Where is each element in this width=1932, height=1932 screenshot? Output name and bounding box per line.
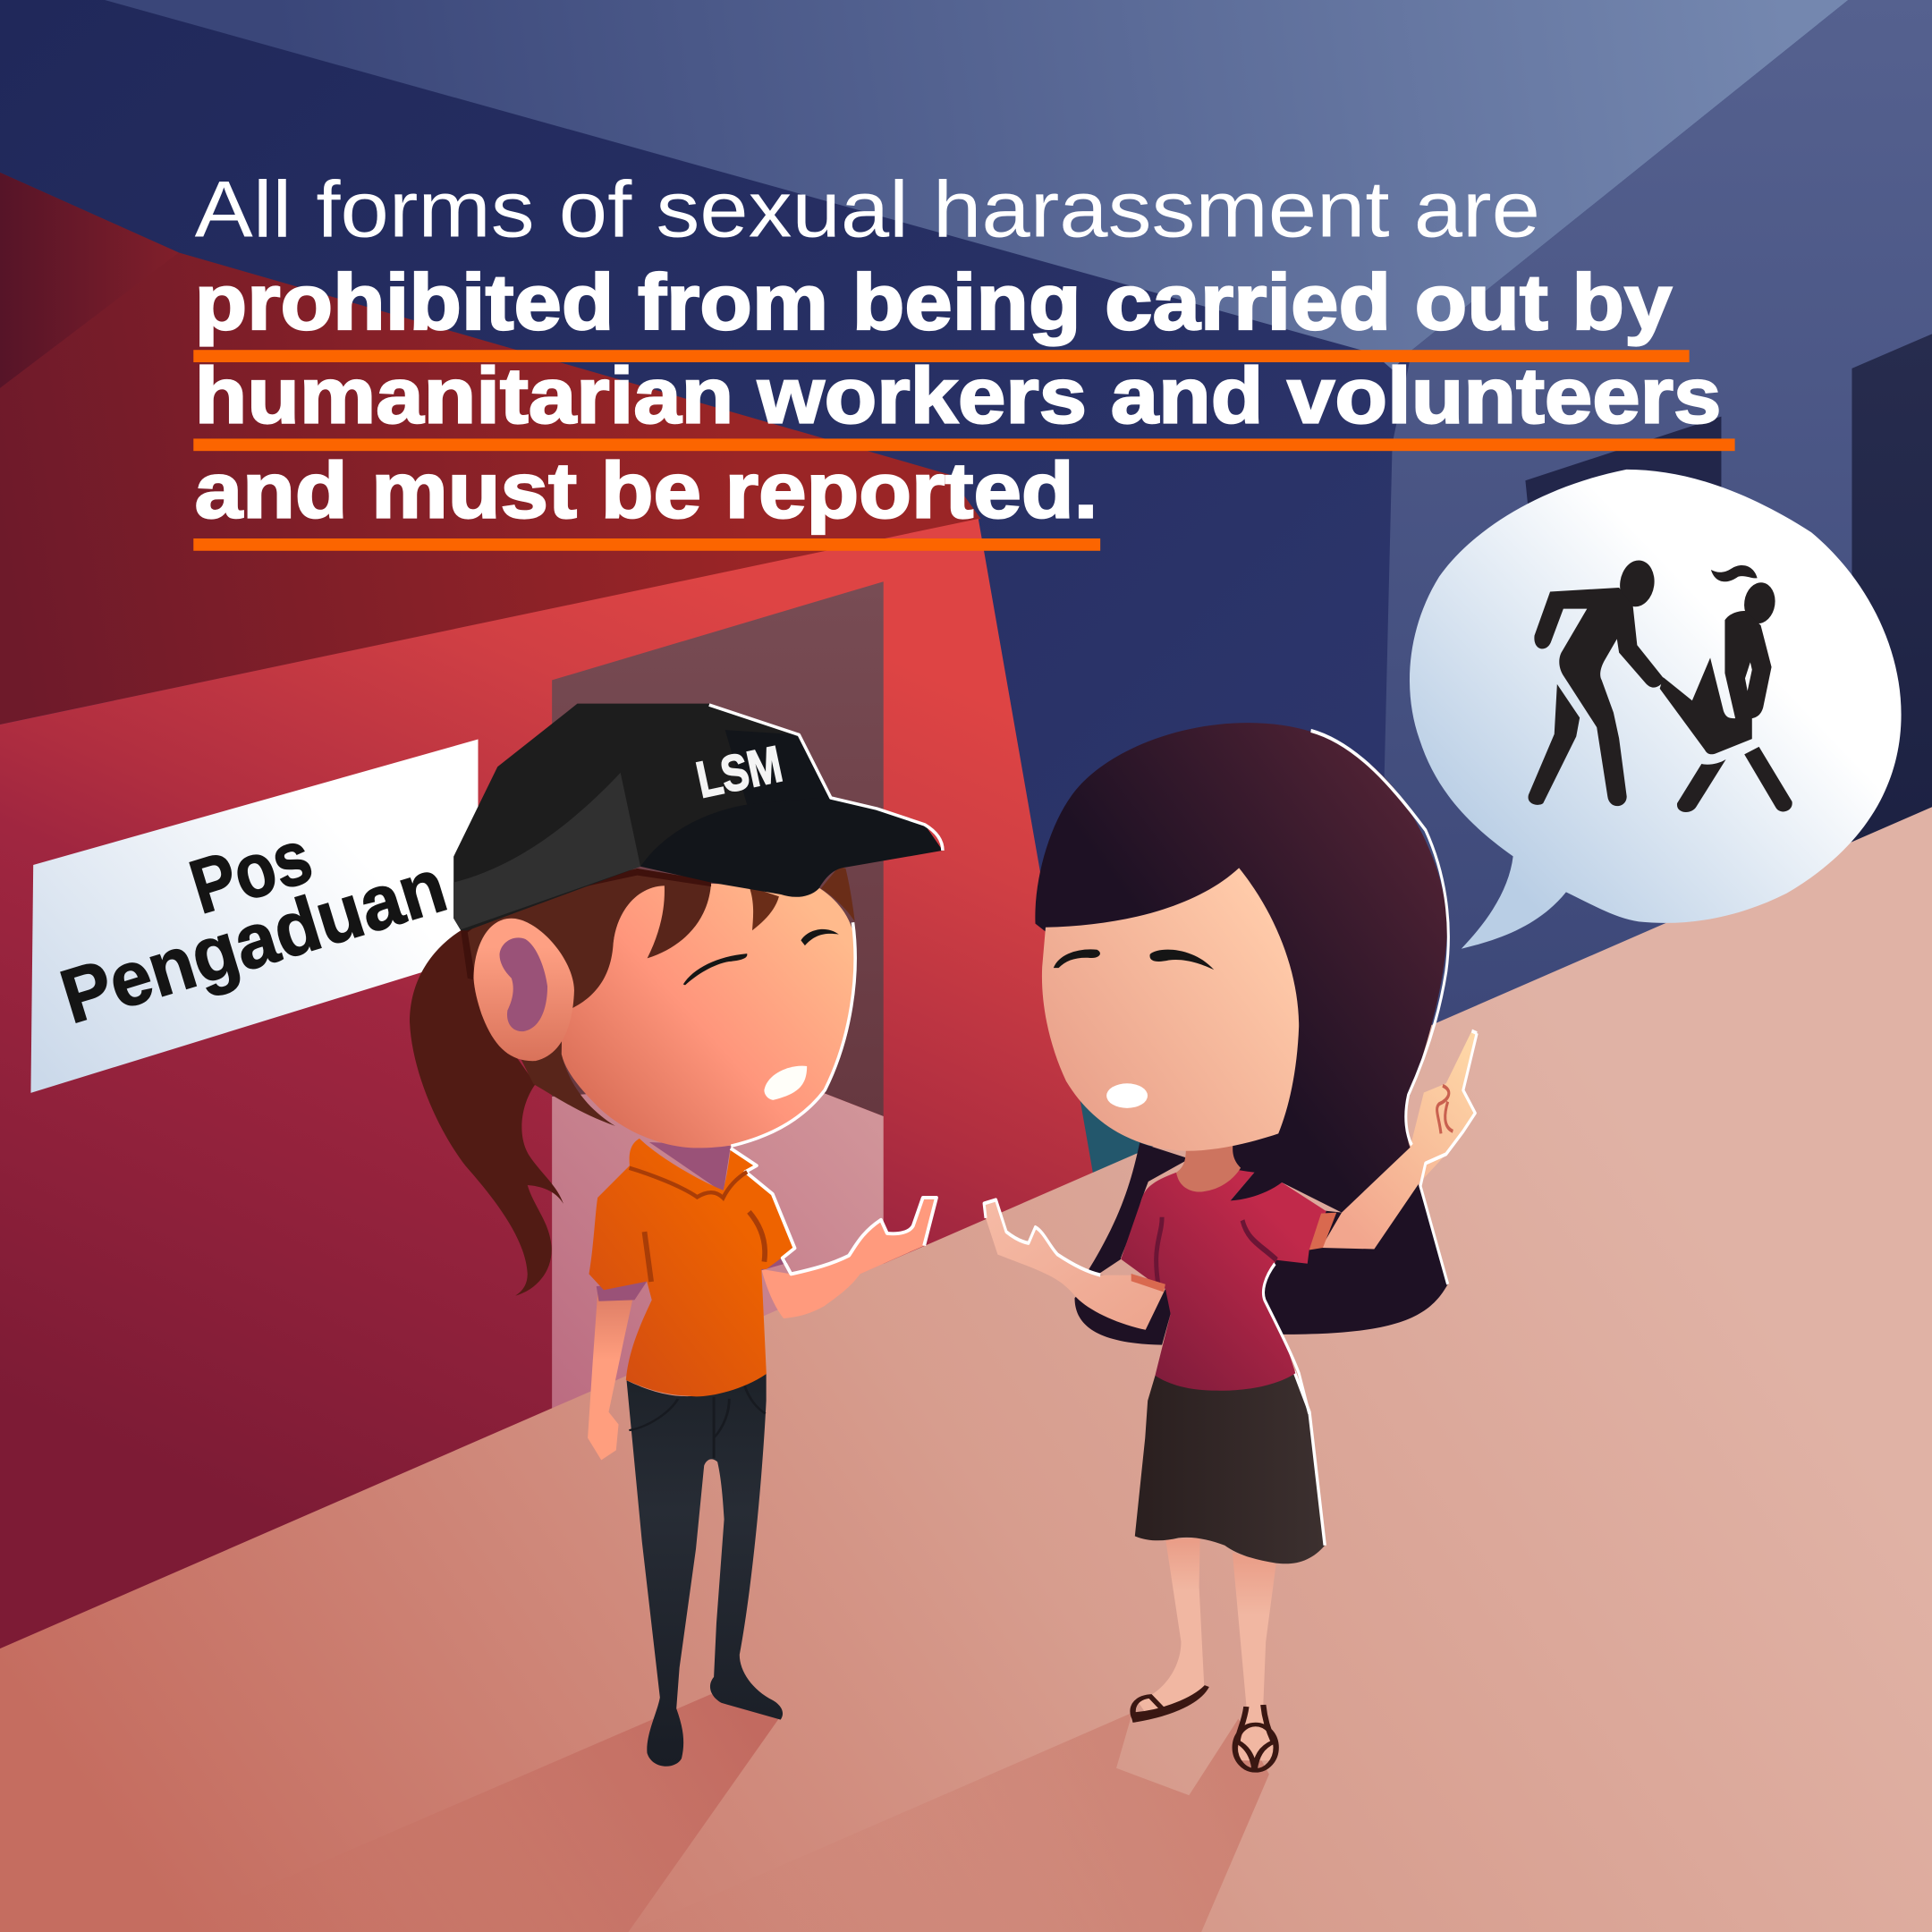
underline 3 [193, 538, 1100, 551]
left arm [588, 1293, 633, 1460]
mouth [764, 1066, 807, 1100]
sign board: Pengaduan [52, 843, 456, 1040]
ponytail [410, 930, 564, 1296]
sleeve cuffs [597, 1256, 787, 1301]
building: red complaint post [0, 173, 1093, 1651]
title line 1: All forms of sexual harassment are [195, 164, 1540, 253]
outlines [709, 705, 943, 1146]
ear [473, 919, 574, 1061]
dark building block behind bubble [1525, 417, 1721, 530]
mouth [1106, 1083, 1148, 1108]
underline 1 [193, 350, 1690, 362]
roof left facet [0, 173, 179, 388]
speech bubble [1410, 470, 1902, 949]
light beam [105, 0, 1848, 369]
sleeve cuff [1309, 1213, 1336, 1250]
door upper [552, 581, 884, 1116]
character: woman speaking [984, 723, 1477, 1770]
lowered arm and hand [984, 1199, 1165, 1330]
shirt folds [1157, 1217, 1276, 1286]
raised arm [1321, 1031, 1477, 1249]
title line 3: humanitarian workers and volunteers [195, 352, 1721, 440]
trousers [627, 1374, 783, 1767]
teal gap [1072, 1097, 1152, 1177]
hand fold lines [1437, 1086, 1453, 1133]
dark building block far right [1852, 334, 1932, 862]
neck [649, 1142, 731, 1192]
head of worker [410, 704, 943, 1296]
legs [1133, 1371, 1325, 1770]
fringe locks [749, 867, 855, 930]
skirt outline [1294, 1371, 1325, 1546]
right arm with hand [761, 1198, 936, 1318]
floor [0, 807, 1932, 1932]
neck [1176, 1145, 1241, 1192]
skirt [1135, 1373, 1325, 1563]
inner ear [499, 937, 547, 1031]
door lower [552, 1080, 884, 1411]
floor shadow right character [629, 1713, 1269, 1932]
face [562, 883, 856, 1148]
title line 4: and must be reported. [195, 446, 1097, 535]
title line 2: prohibited from being carried out by [195, 258, 1672, 346]
trouser seams [629, 1385, 766, 1458]
shirt outline [731, 1148, 936, 1274]
long back hair [1075, 1143, 1448, 1345]
underline 2 [193, 438, 1735, 451]
eyes [1054, 949, 1214, 970]
shirt [1121, 1168, 1326, 1391]
eyes [683, 929, 839, 985]
icon: harassment pictogram [1529, 558, 1792, 812]
orange polo shirt [589, 1139, 795, 1396]
title text [193, 164, 1735, 551]
face [1042, 868, 1299, 1151]
cap [453, 704, 943, 930]
front wall [0, 519, 1093, 1651]
white outlines [984, 731, 1477, 1413]
hair dome [1035, 723, 1447, 1213]
sign text: Pos [181, 814, 321, 930]
sign board [30, 740, 478, 1093]
roof [0, 173, 981, 724]
sandals [1133, 1696, 1276, 1770]
back wall right [1377, 0, 1932, 1060]
cap logo: LSM [691, 735, 787, 809]
floor shadow left character [160, 1694, 779, 1932]
character: humanitarian worker in orange [410, 704, 943, 1767]
dark hair strip under cap [461, 869, 711, 980]
collar folds [630, 1168, 747, 1198]
hair under cap [461, 869, 711, 1126]
